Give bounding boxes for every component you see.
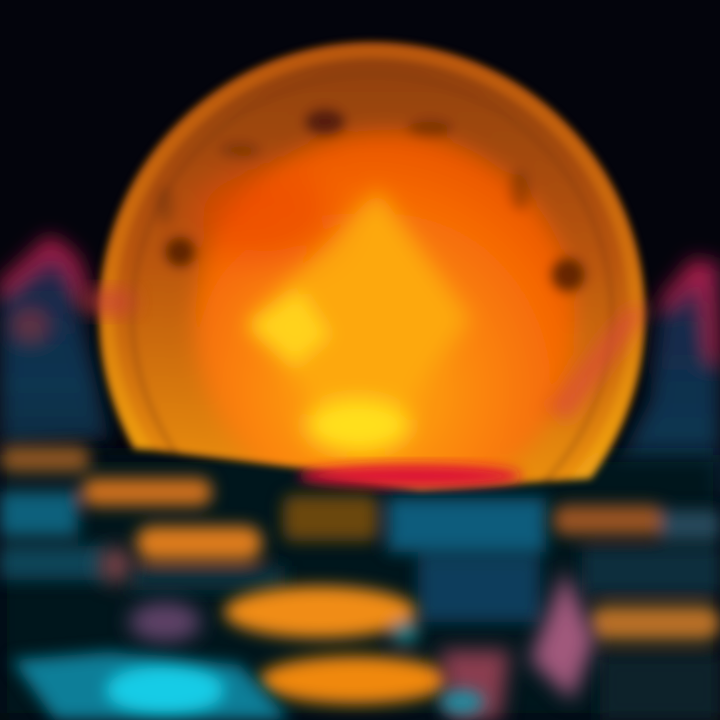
coin body [109, 52, 638, 491]
foreground dark teal wash [0, 455, 720, 720]
coin inner disc [195, 132, 575, 512]
left layered bands [0, 446, 285, 590]
horizon red glow [298, 464, 522, 488]
pink crystal accents [99, 547, 595, 720]
foreground stripes [0, 446, 720, 720]
right bands [553, 505, 720, 720]
pink accent left [80, 288, 136, 316]
cyan pool [12, 652, 484, 720]
coin outer ring [94, 36, 650, 482]
right mountain [610, 262, 720, 500]
coin ring groove [128, 160, 616, 484]
central diamond glow [245, 190, 470, 450]
left mountain [0, 238, 110, 450]
pink accent right [545, 305, 650, 420]
center bands [283, 495, 546, 622]
coin rim marks [157, 109, 585, 292]
upper left red shading [195, 170, 335, 260]
left highlight [250, 290, 330, 365]
center coin stacks [224, 586, 451, 704]
coin [92, 36, 656, 496]
bottom highlight [306, 399, 410, 451]
